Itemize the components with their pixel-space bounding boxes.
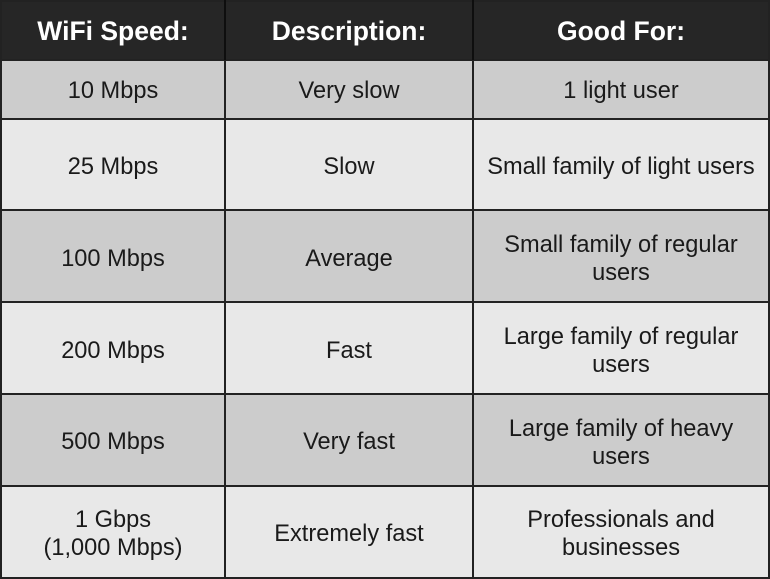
header row: WiFi Speed: [37,16,189,46]
row: 500 Mbps: Very fast [303,429,395,455]
row: 10 Mbps: 1 light user [563,78,679,104]
row: 500 Mbps [0,394,770,486]
row: 500 Mbps: Large family of heavy [509,416,733,442]
row: 1 Gbps: Extremely fast [274,521,424,547]
row: 500 Mbps: 500 Mbps [61,429,165,455]
row: 100 Mbps [0,210,770,302]
row: 200 Mbps: Fast [326,338,372,364]
row: 25 Mbps: Small family of light users [487,154,755,180]
row: 10 Mbps: Very slow [299,78,400,104]
header row: Good For: [557,16,685,46]
row: 100 Mbps: Average [305,246,393,272]
row: 1 Gbps [0,486,770,578]
row: 1 Gbps: (1,000 Mbps) [43,535,183,561]
row: 25 Mbps: Slow [323,154,376,180]
row: 1 Gbps: businesses [562,535,680,561]
row: 200 Mbps [0,302,770,394]
header row [0,0,770,60]
row: 100 Mbps: 100 Mbps [61,246,165,272]
header row: Description: [272,16,426,46]
row: 10 Mbps [0,60,770,119]
row: 1 Gbps: Professionals and [527,507,715,533]
row: 10 Mbps: 10 Mbps [68,78,158,104]
row: 1 Gbps: 1 Gbps [75,507,151,533]
row: 200 Mbps: 200 Mbps [61,338,165,364]
row: 100 Mbps: Small family of regular [504,232,738,258]
row: 200 Mbps: users [592,352,650,378]
row: 25 Mbps [0,119,770,210]
row: 25 Mbps: 25 Mbps [68,154,158,180]
row: 500 Mbps: users [592,444,650,470]
row: 200 Mbps: Large family of regular [504,324,739,350]
row: 100 Mbps: users [592,260,650,286]
